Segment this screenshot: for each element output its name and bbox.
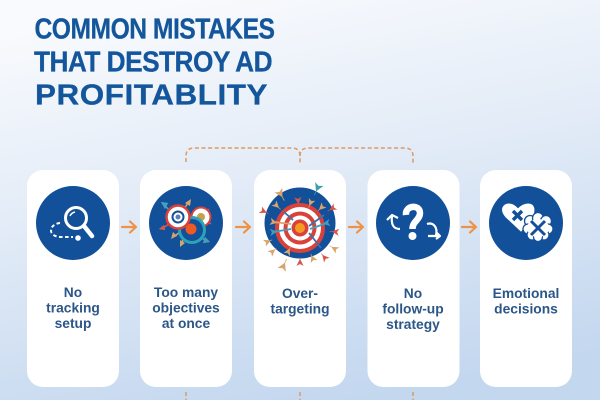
title <box>34 14 275 112</box>
label: at once <box>162 316 210 331</box>
panel: no follow-up <box>368 170 460 387</box>
icon: heart and brain <box>489 186 563 260</box>
arrow <box>122 222 136 232</box>
label: follow-up <box>382 302 444 316</box>
label: strategy <box>386 317 440 332</box>
icon: multiple targets <box>149 186 223 260</box>
panel: over-targeting <box>254 170 346 387</box>
label: No <box>404 286 422 301</box>
label: Too many <box>154 285 218 300</box>
icon: magnifying glass <box>36 186 110 260</box>
panel: too many objectives <box>140 170 232 387</box>
label: Emotional <box>493 286 559 301</box>
label: setup <box>55 316 91 331</box>
label: No <box>64 285 82 300</box>
icon: crowded bullseye <box>260 183 338 271</box>
top dashed connector <box>186 148 413 163</box>
label: tracking <box>46 300 100 316</box>
arrow <box>236 222 250 232</box>
label: targeting <box>270 302 330 316</box>
arrow <box>349 222 363 232</box>
title: THAT DESTROY AD <box>34 46 272 78</box>
bottom dashed connector stubs <box>186 392 413 400</box>
label: Over- <box>282 286 318 301</box>
icon: question mark and arrows <box>376 186 450 260</box>
panel: emotional decisions <box>480 170 572 387</box>
title: PROFITABLITY <box>35 80 268 112</box>
title: COMMON MISTAKES <box>34 14 275 46</box>
label: objectives <box>152 300 220 316</box>
label: decisions <box>494 302 558 316</box>
panel: no tracking setup <box>27 170 119 387</box>
arrow <box>462 222 476 232</box>
